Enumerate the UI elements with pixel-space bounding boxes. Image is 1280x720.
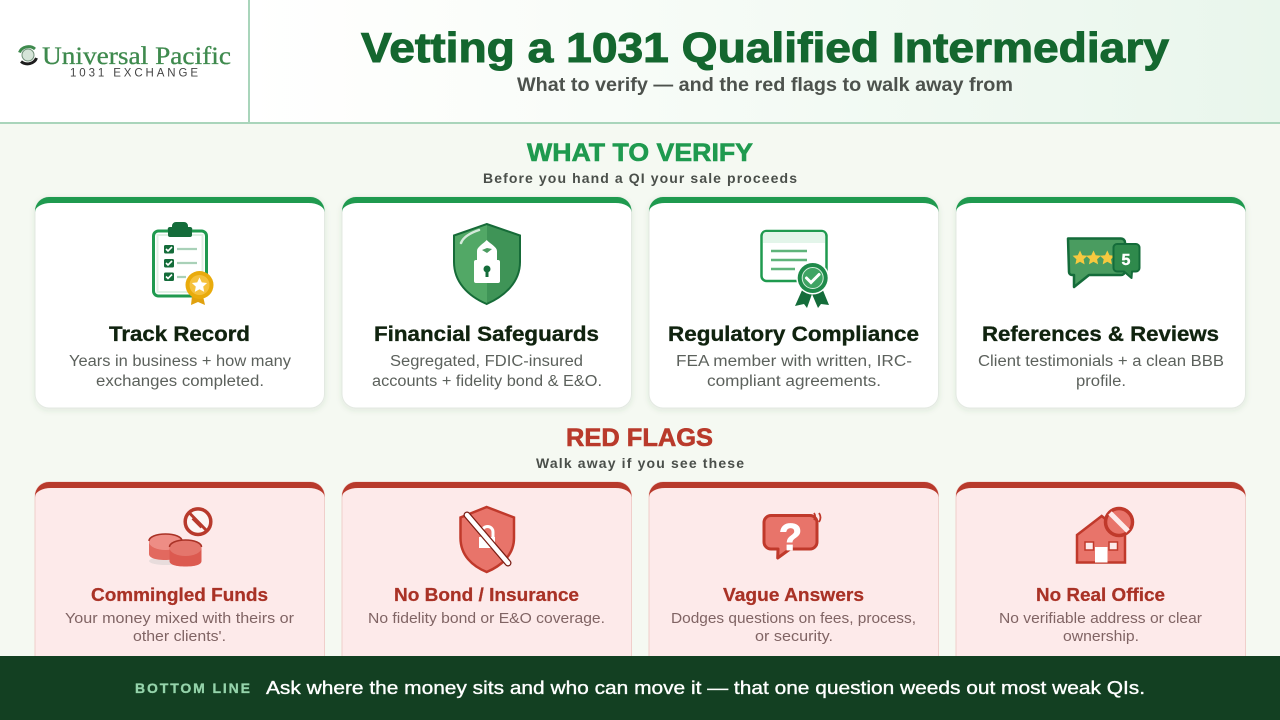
- card description: Dodges questions on fees, process,: [671, 611, 916, 627]
- panel: financial safeguards: [342, 197, 632, 408]
- icon: question bubble: ?: [779, 517, 802, 559]
- panel: no bond or insurance: [342, 482, 632, 672]
- icon: crossed house: [1077, 508, 1132, 562]
- header band: [0, 0, 1280, 124]
- card title: Financial Safeguards: [374, 323, 599, 346]
- card description: No verifiable address or clear: [999, 611, 1202, 627]
- card description: other clients'.: [133, 629, 226, 645]
- panel: no real office: [956, 482, 1246, 672]
- icon: logo globe: [20, 47, 36, 64]
- heading: red flags: RED FLAGS: [566, 424, 713, 452]
- card description: [69, 353, 291, 390]
- title: Vetting a 1031 Qualified Intermediary: [361, 24, 1170, 71]
- logo: [20, 43, 231, 80]
- icon: certificate: [762, 231, 829, 308]
- card description: ownership.: [1063, 629, 1139, 645]
- panel: track record: [35, 197, 324, 408]
- logo tagline: 1031 EXCHANGE: [70, 68, 198, 80]
- icon: clipboard: [154, 222, 214, 305]
- card description: Client testimonials + a clean BBB: [978, 353, 1224, 370]
- icon: mixed coins: [149, 509, 211, 566]
- icon: review bubbles: 5: [1122, 252, 1131, 269]
- card title: References & Reviews: [982, 323, 1219, 346]
- card description: accounts + fidelity bond & E&O.: [372, 373, 602, 390]
- card description: or security.: [755, 629, 833, 645]
- card title: No Bond / Insurance: [394, 584, 579, 605]
- subheading: red flags: Walk away if you see these: [536, 455, 744, 471]
- icon: shield with lock: [454, 224, 520, 304]
- icon: crossed shield: [460, 507, 514, 572]
- card description: Years in business + how many: [69, 353, 291, 370]
- panel: regulatory compliance: [649, 197, 939, 408]
- bottom line label: BOTTOM LINE: [135, 680, 250, 696]
- logo wordmark: Universal Pacific: [42, 43, 231, 70]
- card description: [978, 353, 1224, 390]
- bottom line bar: [0, 656, 1280, 720]
- card description: [372, 353, 602, 390]
- bottom line message: Ask where the money sits and who can move it — that one question weeds out most weak QIs.: [266, 677, 1145, 698]
- panel: vague answers: [649, 482, 939, 672]
- subheading: what to verify: Before you hand a QI your sale proceeds: [483, 170, 797, 186]
- card title: Vague Answers: [723, 584, 864, 605]
- panel: references and reviews: [956, 197, 1246, 408]
- card description: No fidelity bond or E&O coverage.: [368, 611, 605, 627]
- card title: Regulatory Compliance: [668, 323, 919, 346]
- icon: review bubbles: [1068, 238, 1140, 287]
- card description: [671, 611, 916, 645]
- card title: No Real Office: [1036, 584, 1165, 605]
- card title: Track Record: [109, 323, 250, 346]
- card description: FEA member with written, IRC-: [676, 353, 912, 370]
- card description: Segregated, FDIC-insured: [390, 353, 583, 370]
- card description: exchanges completed.: [96, 373, 264, 390]
- card description: compliant agreements.: [707, 373, 881, 390]
- card description: Your money mixed with theirs or: [65, 611, 294, 627]
- heading: what to verify: WHAT TO VERIFY: [527, 139, 753, 167]
- card description: [676, 353, 912, 390]
- subtitle: What to verify — and the red flags to walk away from: [517, 75, 1013, 96]
- card description: [999, 611, 1202, 645]
- icon: question bubble: [764, 513, 820, 559]
- panel: commingled funds: [35, 482, 324, 672]
- card title: Commingled Funds: [91, 584, 268, 605]
- card description: profile.: [1076, 373, 1126, 390]
- card description: [65, 611, 294, 645]
